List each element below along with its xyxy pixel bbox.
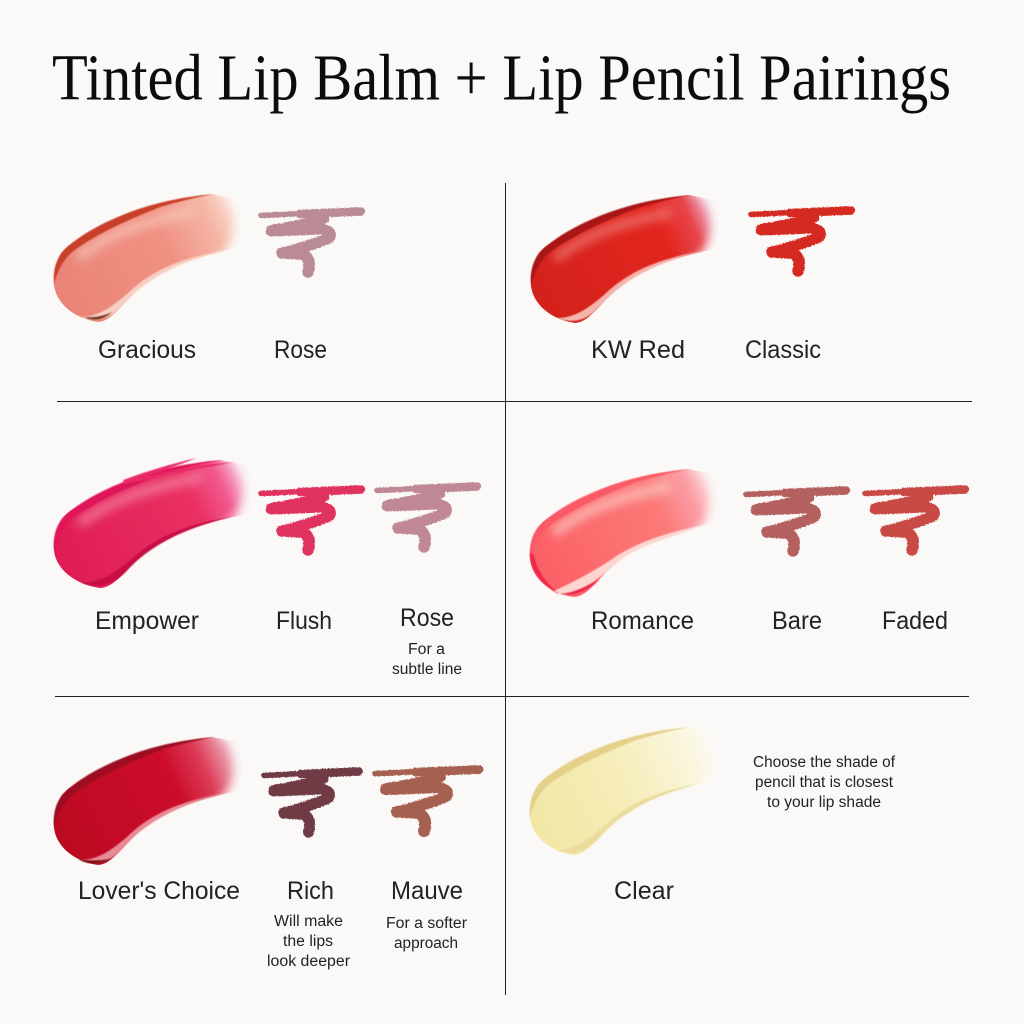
note: Choose the shade of pencil: to your lip shade xyxy=(767,794,881,811)
note: Will make the lips look deeper: Will make xyxy=(274,913,343,930)
panel: Clear pairing xyxy=(530,727,896,905)
note: Will make the lips look deeper: the lips xyxy=(283,933,333,950)
note: For a softer approach: approach xyxy=(394,935,458,952)
pencil: Rich xyxy=(264,772,359,832)
panel: Gracious pairing xyxy=(54,194,361,364)
label: Gracious: Gracious xyxy=(98,336,196,364)
panel: Empower pairing xyxy=(54,458,477,678)
note: Will make the lips look deeper: look deeper xyxy=(267,953,350,970)
label: Rose: Rose xyxy=(274,336,327,364)
note: For a softer approach: For a softer xyxy=(386,915,467,932)
label: Lover's Choice: Lover's Choice xyxy=(78,877,240,905)
note: For a subtle line: For a xyxy=(408,641,445,658)
pencil: Faded xyxy=(865,490,965,550)
label: KW Red: KW Red xyxy=(591,336,685,364)
label: Flush: Flush xyxy=(276,607,332,635)
label: Bare: Bare xyxy=(772,607,822,635)
swatch: Empower balm xyxy=(54,458,251,588)
note: Choose the shade of pencil: Choose the shade of xyxy=(753,754,896,771)
pencil: Bare xyxy=(746,490,846,551)
label: Clear: Clear xyxy=(614,877,674,905)
note: For a softer approach xyxy=(386,915,467,952)
label: Romance: Romance xyxy=(591,607,694,635)
pencil: Rose xyxy=(377,486,477,547)
pencil: Flush xyxy=(261,490,361,550)
pencil: Rose xyxy=(261,212,361,272)
note: Choose the shade of pencil: pencil that is closest xyxy=(755,774,894,791)
swatch: Lover's Choice balm xyxy=(54,737,242,865)
note: For a subtle line: subtle line xyxy=(392,661,462,678)
label: Empower: Empower xyxy=(95,607,199,635)
label: Mauve: Mauve xyxy=(391,877,463,905)
note: For a subtle line xyxy=(392,641,462,678)
panel: KW Red pairing xyxy=(531,195,851,364)
label: Classic: Classic xyxy=(745,336,821,364)
swatch: KW Red balm xyxy=(531,195,719,323)
label: Faded: Faded xyxy=(882,607,948,635)
note: Will make the lips look deeper xyxy=(267,913,350,970)
label: Rich: Rich xyxy=(287,877,334,905)
label: Rose: Rose xyxy=(400,604,454,632)
swatch: Clear balm xyxy=(530,727,718,855)
swatch: Romance balm xyxy=(530,469,718,597)
swatch: Gracious balm xyxy=(54,194,242,322)
pencil: Mauve xyxy=(375,770,479,831)
pencil: Classic xyxy=(751,210,851,271)
panel: Lover's Choice pairing xyxy=(54,737,479,970)
panel: Romance pairing xyxy=(530,469,965,635)
note: Choose the shade of pencil xyxy=(753,754,896,811)
